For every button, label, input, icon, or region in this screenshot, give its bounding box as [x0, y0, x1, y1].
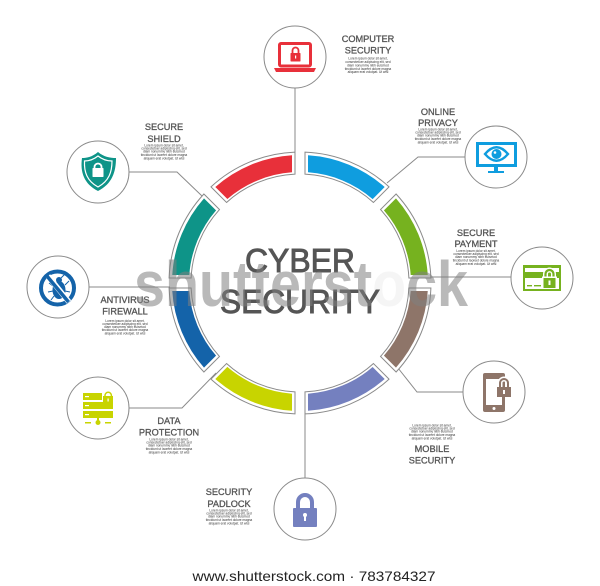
- label: secure payment: SECURE: [457, 228, 495, 238]
- label: secure shield: SHIELD: [147, 134, 181, 144]
- label: data protection: consectetuer adipiscing elit, sed: [146, 440, 192, 444]
- icon: prohibited bug: [27, 256, 89, 318]
- label: security padlock: diam nonummy nibh euismod: [208, 514, 250, 518]
- label: antivirus firewall: ANTIVIRUS: [100, 295, 150, 305]
- label: computer security: diam nonummy nibh euismod: [347, 64, 389, 68]
- label: security padlock: tincidunt ut laoreet dolore magna: [206, 518, 252, 522]
- label: data protection: DATA: [157, 416, 181, 426]
- label: security padlock: consectetuer adipiscing elit, sed: [206, 512, 252, 516]
- label: security padlock: aliquam erat volutpat. Ut wisi: [209, 522, 250, 526]
- label: secure shield: SECURE: [145, 122, 183, 132]
- label: data protection: PROTECTION: [139, 428, 199, 438]
- label: computer security: consectetuer adipiscing elit, sed: [345, 60, 391, 64]
- ring diagram: [89, 88, 511, 478]
- label: antivirus firewall: [100, 295, 150, 336]
- label: antivirus firewall: diam nonummy nibh euismod: [104, 325, 146, 329]
- label: antivirus firewall: consectetuer adipiscing elit, sed: [102, 322, 148, 326]
- label: online privacy: ONLINE: [421, 107, 455, 117]
- segment: online privacy blue: [305, 152, 389, 202]
- label: security padlock: SECURITY: [206, 487, 252, 497]
- label: antivirus firewall: tincidunt ut laoreet dolore magna: [102, 328, 148, 332]
- label: computer security: tincidunt ut laoreet dolore magna: [345, 67, 391, 71]
- caption: stock id: www.shutterstock.com · 783784327: [191, 568, 436, 584]
- label: secure shield: diam nonummy nibh euismod: [143, 150, 185, 154]
- center title: CYBER: [245, 242, 355, 279]
- label: security padlock: PADLOCK: [207, 499, 251, 509]
- label: data protection: aliquam erat volutpat. Ut wisi: [149, 450, 190, 454]
- label: data protection: [139, 416, 199, 454]
- label: security padlock: Lorem ipsum dolor sit amet,: [209, 508, 249, 512]
- label: mobile security: aliquam erat volutpat. Ut wisi: [412, 436, 453, 440]
- label: secure payment: PAYMENT: [454, 239, 498, 249]
- label: mobile security: MOBILE: [415, 444, 449, 454]
- label: online privacy: consectetuer adipiscing elit, sed: [415, 130, 461, 134]
- label: computer security: SECURITY: [345, 46, 391, 56]
- label: secure payment: diam nonummy nibh euismod: [455, 255, 497, 259]
- icon: monitor with eye: [465, 126, 527, 188]
- label: computer security: COMPUTER: [342, 34, 395, 44]
- icon: laptop with padlock: [264, 26, 326, 88]
- label: mobile security: SECURITY: [409, 456, 455, 466]
- leader lines: [89, 88, 511, 478]
- label: online privacy: diam nonummy nibh euismod: [417, 134, 459, 138]
- label: antivirus firewall: FIREWALL: [102, 306, 148, 316]
- segment: secure shield teal: [169, 194, 219, 278]
- icon: credit card with padlock: [511, 247, 573, 309]
- center title: [220, 242, 380, 320]
- label: online privacy: Lorem ipsum dolor sit amet,: [418, 128, 458, 132]
- label: computer security: Lorem ipsum dolor sit amet,: [348, 56, 388, 60]
- label: data protection: tincidunt ut laoreet dolore magna: [146, 447, 192, 451]
- label: secure payment: Lorem ipsum dolor sit amet,: [456, 249, 496, 253]
- label: secure payment: consectetuer adipiscing elit, sed: [453, 252, 499, 256]
- label: antivirus firewall: aliquam erat volutpat. Ut wisi: [105, 332, 146, 336]
- label: computer security: aliquam erat volutpat. Ut wisi: [348, 70, 389, 74]
- label: secure shield: consectetuer adipiscing elit, sed: [141, 146, 187, 150]
- segment: mobile security brown: [381, 288, 431, 372]
- icon: data server with padlock: [67, 377, 129, 439]
- watermark: shutterstock: [134, 248, 468, 320]
- label: data protection: Lorem ipsum dolor sit amet,: [149, 438, 189, 442]
- segment: secure payment green: [360, 194, 456, 289]
- label: mobile security: diam nonummy nibh euismod: [411, 430, 453, 434]
- center title: SECURITY: [220, 283, 380, 320]
- label: data protection: diam nonummy nibh euismod: [148, 444, 190, 448]
- label: secure payment: tincidunt ut laoreet dolore magna: [453, 258, 499, 262]
- label: secure payment: [453, 228, 499, 266]
- icon: shield with padlock: [67, 141, 129, 203]
- label: secure shield: aliquam erat volutpat. Ut wisi: [144, 156, 185, 160]
- label: secure payment: aliquam erat volutpat. Ut wisi: [456, 262, 497, 266]
- label: mobile security: [409, 424, 455, 466]
- label: mobile security: consectetuer adipiscing elit, sed: [409, 426, 455, 430]
- segment: security padlock lavender: [294, 343, 389, 439]
- label: online privacy: aliquam erat volutpat. Ut wisi: [418, 140, 459, 144]
- label: secure shield: Lorem ipsum dolor sit amet,: [144, 144, 184, 148]
- segment: computer security red: [211, 127, 306, 223]
- icon: smartphone with padlock: [463, 361, 525, 423]
- label: mobile security: Lorem ipsum dolor sit amet,: [412, 424, 452, 428]
- segment: data protection lime: [211, 364, 295, 414]
- label: online privacy: [415, 107, 461, 144]
- segment: antivirus firewall dark blue: [144, 277, 240, 372]
- label: security padlock: [206, 487, 252, 526]
- label: antivirus firewall: Lorem ipsum dolor sit amet,: [105, 319, 145, 323]
- label: online privacy: PRIVACY: [418, 118, 458, 128]
- label: online privacy: tincidunt ut laoreet dolore magna: [415, 137, 461, 141]
- label: computer security: [342, 34, 395, 74]
- label: secure shield: tincidunt ut laoreet dolore magna: [141, 153, 187, 157]
- label: mobile security: tincidunt ut laoreet dolore magna: [409, 433, 455, 437]
- label: secure shield: [141, 122, 187, 160]
- icon: padlock: [274, 478, 336, 540]
